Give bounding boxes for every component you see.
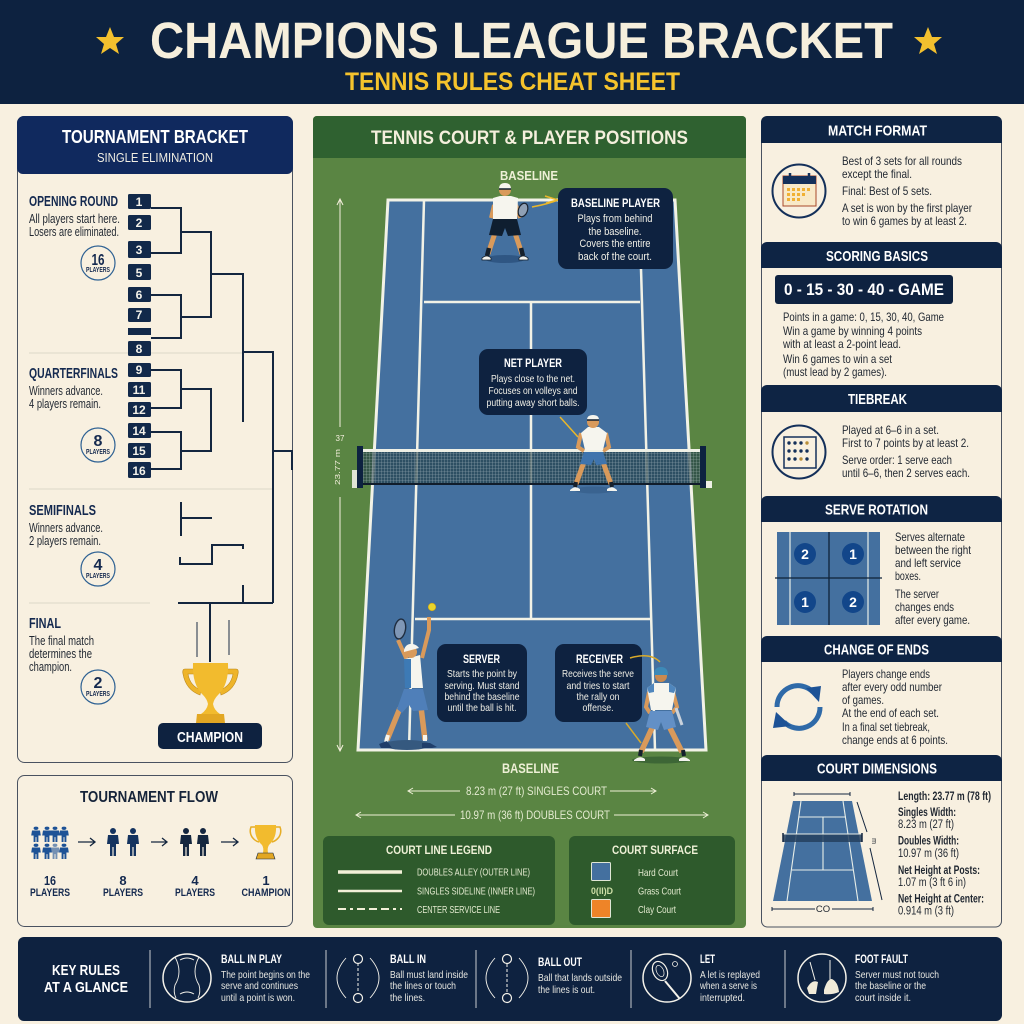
rule: foot fault: court inside it.	[855, 992, 911, 1004]
section: change of ends: At the end of each set.	[842, 706, 939, 720]
rule: let	[643, 954, 760, 1004]
panel: court surface	[569, 836, 735, 925]
rule: ball in play: until a point is won.	[221, 992, 295, 1004]
bracket header: TOURNAMENT BRACKET	[62, 127, 248, 147]
icon: ball in	[337, 954, 379, 1002]
section: match format: to win 6 games by at least 2.	[842, 214, 967, 228]
section: match format: A set is won by the first player	[842, 201, 972, 215]
bracket lines	[151, 208, 292, 662]
arrow	[151, 838, 167, 846]
player: baseline	[482, 183, 530, 263]
rule: let: interrupted.	[700, 992, 745, 1004]
section: court dimensions: 1.07 m (3 ft 6 in)	[898, 877, 966, 889]
flow: 16 players	[30, 827, 70, 899]
subtitle: TENNIS RULES CHEAT SHEET	[345, 68, 680, 96]
champion label: CHAMPION	[177, 730, 243, 746]
score sequence	[775, 275, 953, 304]
round: quarterfinals	[29, 365, 118, 462]
callout: receiver	[555, 644, 642, 722]
flow heading: TOURNAMENT FLOW	[80, 789, 218, 806]
title banner	[0, 0, 1024, 104]
seed boxes: 11	[133, 383, 146, 397]
section: match format: except the final.	[842, 167, 912, 181]
icon: change ends arrows	[773, 686, 821, 728]
length arrow: 23.77 m	[335, 449, 342, 485]
panel: court surface: Clay Court	[638, 904, 676, 916]
seed boxes: 7	[136, 308, 143, 322]
icon: racket	[643, 954, 691, 1002]
rule: ball in play: The point begins on the	[221, 969, 310, 981]
section: change of ends	[761, 636, 1002, 747]
score sequence: 0 - 15 - 30 - 40 - GAME	[784, 280, 944, 299]
badge: 2 players: 2	[94, 675, 103, 692]
section: match format: Final: Best of 5 sets.	[842, 184, 932, 198]
section: tiebreak: TIEBREAK	[848, 391, 907, 408]
flow: 8 players: PLAYERS	[103, 887, 143, 899]
section: court dimensions: 10.97 m (36 ft)	[898, 848, 959, 860]
section: serve rotation	[761, 496, 1002, 627]
key rules heading: AT A GLANCE	[44, 979, 128, 996]
badge: 8 players	[81, 428, 115, 462]
round: final: FINAL	[29, 615, 61, 632]
panel: tennis court	[313, 116, 746, 928]
serve rotation diagram: 2	[849, 594, 857, 610]
section: scoring basics: (must lead by 2 games).	[783, 365, 887, 379]
icon: ball	[163, 954, 211, 1002]
callout: receiver: Receives the serve	[562, 668, 634, 680]
section: scoring basics: Points in a game: 0, 15, 30, 40, Game	[783, 310, 944, 324]
seed boxes: 6	[136, 288, 143, 302]
section: match format: MATCH FORMAT	[828, 122, 927, 140]
panel: court surface: Grass Court	[638, 886, 681, 898]
seed boxes: 9	[136, 363, 143, 377]
dimension: singles width: 8.23 m (27 ft) SINGLES COURT	[466, 784, 608, 798]
panel: tournament flow	[18, 776, 292, 926]
rule: let: A let is replayed	[700, 969, 760, 981]
icon: tiebreak board	[772, 426, 826, 478]
badge: 8 players: 8	[94, 433, 103, 450]
key rules heading	[44, 962, 128, 996]
badge: 16 players	[81, 246, 115, 280]
callout: baseline player: Covers the entire	[580, 238, 650, 250]
dimension: doubles width	[356, 808, 708, 822]
rule: ball out: the lines is out.	[538, 984, 595, 996]
rule: ball in: the lines.	[390, 992, 425, 1004]
flow: 8 players: 8	[119, 873, 127, 888]
key rules heading: KEY RULES	[52, 962, 120, 979]
section: court dimensions	[761, 755, 1002, 918]
section: serve rotation: after every game.	[895, 613, 970, 627]
badge: 16 players: 16	[92, 252, 105, 269]
callout: server: behind the baseline	[444, 691, 520, 703]
icon: right star	[914, 27, 942, 54]
label: top baseline: BASELINE	[500, 168, 558, 183]
seed boxes: 1	[136, 195, 143, 209]
seed boxes: 8	[136, 342, 143, 356]
round: final: determines the	[29, 647, 92, 661]
section: scoring basics: with at least a 2-point lead.	[782, 337, 901, 351]
callout: receiver: RECEIVER	[576, 652, 623, 666]
rule: ball in play: BALL IN PLAY	[221, 954, 282, 966]
callout: receiver: the rally on	[576, 691, 620, 703]
callout: baseline player	[558, 188, 673, 269]
serve rotation diagram: 1	[849, 546, 857, 562]
section: change of ends: Players change ends	[842, 667, 930, 681]
section: match format: Best of 3 sets for all rounds	[842, 154, 962, 168]
badge: 2 players	[81, 670, 115, 704]
section: change of ends: CHANGE OF ENDS	[824, 642, 929, 658]
rule: let: LET	[700, 954, 715, 966]
callout: receiver: offense.	[582, 702, 614, 714]
net	[352, 446, 712, 488]
section: court dimensions: Net Height at Center:	[898, 894, 984, 906]
badge: 4 players	[81, 552, 115, 586]
rule: ball in: Ball must land inside	[390, 969, 468, 981]
title: CHAMPIONS LEAGUE BRACKET	[150, 12, 893, 69]
icon: feet	[798, 954, 846, 1002]
round: opening round: OPENING ROUND	[29, 193, 118, 210]
panel: court line legend	[323, 836, 555, 925]
section: scoring basics: Win a game by winning 4 points	[783, 324, 922, 338]
callout: net player: putting away short balls.	[486, 398, 580, 409]
section: serve rotation: changes ends	[895, 600, 954, 614]
round: final	[29, 615, 115, 704]
round: quarterfinals: 4 players remain.	[29, 397, 101, 411]
section: serve rotation: between the right	[895, 543, 972, 557]
seed boxes: 14	[132, 424, 146, 438]
rule: let: when a serve is	[699, 980, 757, 992]
callout: baseline player: back of the court.	[578, 251, 652, 263]
court surface and lines	[358, 200, 706, 750]
callout arrow: net	[560, 417, 578, 437]
flow: 4 players: 4	[191, 873, 199, 888]
rule: ball in	[337, 954, 468, 1004]
serve rotation diagram	[775, 532, 882, 625]
round: semifinals: Winners advance.	[29, 521, 103, 535]
section: court dimensions: 8.23 m (27 ft)	[898, 819, 954, 831]
icon: calendar	[772, 164, 826, 218]
serve rotation diagram: 1	[801, 594, 809, 610]
callout: baseline player: Plays from behind	[578, 213, 652, 225]
round: quarterfinals: QUARTERFINALS	[29, 365, 118, 382]
rule: foot fault	[798, 954, 939, 1004]
section: serve rotation: and left service	[895, 556, 961, 570]
seed boxes: 2	[136, 216, 143, 230]
section: court dimensions: Doubles Width:	[898, 836, 959, 848]
section: scoring basics: SCORING BASICS	[826, 248, 928, 265]
callout: net player	[479, 349, 587, 415]
dimension: singles width	[408, 784, 656, 798]
rule: ball out: Ball that lands outside	[538, 972, 622, 984]
panel: court line legend: SINGLES SIDELINE (INNER LINE)	[417, 886, 535, 898]
mini court diagram: m	[870, 838, 877, 844]
badge: 4 players: 4	[94, 557, 103, 574]
callout: receiver: and tries to start	[566, 680, 630, 692]
dimension: doubles width: 10.97 m (36 ft) DOUBLES COURT	[460, 808, 611, 822]
section: tiebreak	[761, 385, 1002, 480]
section: tiebreak: Played at 6–6 in a set.	[842, 423, 939, 437]
panel: court line legend: DOUBLES ALLEY (OUTER LINE)	[417, 868, 530, 878]
arrow	[78, 838, 95, 846]
seed boxes: 3	[136, 243, 143, 257]
callout: server: serving. Must stand	[444, 680, 520, 692]
callout: server: until the ball is hit.	[448, 702, 516, 714]
mini court diagram	[772, 792, 882, 915]
flow: 1 champion: CHAMPION	[242, 887, 291, 899]
callout arrow: baseline	[532, 196, 558, 207]
player: server	[379, 603, 437, 750]
flow: 16 players: PLAYERS	[30, 887, 70, 899]
rule: ball in play	[163, 954, 310, 1004]
serve rotation diagram: 2	[801, 546, 809, 562]
section: change of ends: after every odd number	[842, 680, 942, 694]
panel: court surface: Hard Court	[638, 867, 678, 879]
rule: foot fault: Server must not touch	[855, 969, 939, 981]
panel: rules sidebar	[761, 116, 1002, 927]
section: match format	[761, 116, 1002, 228]
panel: court line legend: COURT LINE LEGEND	[386, 843, 492, 857]
mini court diagram: CO	[816, 904, 830, 915]
bracket header: SINGLE ELIMINATION	[97, 150, 213, 165]
badge: 2 players: PLAYERS	[86, 691, 110, 698]
callout: server: Starts the point by	[447, 668, 518, 680]
seed boxes: 15	[132, 444, 146, 458]
round: final: champion.	[29, 660, 72, 674]
panel: court line legend: CENTER SERVICE LINE	[417, 905, 500, 916]
callout arrows: receiver	[626, 656, 660, 743]
section: scoring basics: Win 6 games to win a set	[783, 352, 893, 366]
section: serve rotation: boxes.	[895, 569, 921, 583]
label: bottom baseline: BASELINE	[502, 761, 559, 776]
rule: foot fault: the baseline or the	[855, 980, 926, 992]
seed boxes	[128, 194, 151, 478]
callout: server	[437, 644, 527, 722]
section: tiebreak: First to 7 points by at least 2.	[842, 436, 969, 450]
section: serve rotation: Serves alternate	[895, 530, 965, 544]
rule: ball in: the lines or touch	[390, 980, 456, 992]
seed boxes: 16	[132, 464, 146, 478]
section: serve rotation: The server	[895, 587, 939, 601]
round: semifinals: SEMIFINALS	[29, 502, 96, 519]
rule: ball in play: serve and continues	[221, 980, 298, 992]
flow: 4 players	[175, 828, 215, 899]
section: serve rotation: SERVE ROTATION	[825, 502, 928, 518]
flow: 16 players: 16	[44, 873, 56, 888]
flow: 8 players	[103, 828, 143, 899]
round: semifinals: 2 players remain.	[29, 534, 101, 548]
player: receiver	[632, 667, 690, 764]
section: court dimensions: COURT DIMENSIONS	[817, 760, 937, 778]
section: tiebreak: Serve order: 1 serve each	[842, 453, 952, 467]
arrow	[221, 838, 238, 846]
round: final: The final match	[29, 634, 94, 648]
callout: net player: Plays close to the net.	[491, 374, 575, 385]
flow: 1 champion	[242, 825, 291, 899]
badge: 16 players: PLAYERS	[86, 267, 110, 274]
callout: net player: NET PLAYER	[504, 356, 562, 370]
seed boxes: 5	[136, 266, 143, 280]
callout: net player: Focuses on volleys and	[488, 386, 578, 397]
panel: court surface: 0(ll)D	[591, 886, 613, 896]
bracket header	[17, 116, 293, 174]
icon: left star	[96, 27, 124, 54]
section: court dimensions: 0.914 m (3 ft)	[898, 906, 954, 918]
icon: ball out	[486, 954, 528, 1002]
callout: baseline player: the baseline.	[588, 226, 642, 238]
badge: 4 players: PLAYERS	[86, 573, 110, 580]
panel: tournament bracket	[17, 116, 293, 762]
badge: 8 players: PLAYERS	[86, 449, 110, 456]
section: change of ends: of games.	[842, 693, 884, 707]
round: opening round: All players start here.	[29, 212, 120, 226]
section: tiebreak: until 6–6, then 2 serves each.	[842, 466, 970, 480]
round: opening round: Losers are eliminated.	[29, 225, 119, 239]
flow: 4 players: PLAYERS	[175, 887, 215, 899]
champion label	[158, 723, 262, 749]
callout: server: SERVER	[463, 652, 500, 666]
flow: 1 champion: 1	[262, 873, 270, 888]
rule: ball in: BALL IN	[390, 954, 426, 966]
rule: ball out	[486, 954, 622, 1002]
section: scoring basics	[761, 242, 1002, 379]
seed boxes: 12	[132, 403, 146, 417]
section: court dimensions: Singles Width:	[898, 807, 956, 819]
rule: ball out: BALL OUT	[538, 957, 582, 969]
court heading	[313, 116, 746, 158]
court heading: TENNIS COURT & PLAYER POSITIONS	[371, 128, 688, 149]
length arrow: 37	[336, 434, 345, 443]
section: court dimensions: Length: 23.77 m (78 ft)	[898, 791, 991, 803]
icon: champion trophy	[183, 663, 238, 723]
round: opening round	[29, 193, 120, 280]
round: quarterfinals: Winners advance.	[29, 384, 103, 398]
length arrow	[335, 199, 345, 751]
section: change of ends: In a final set tiebreak,	[842, 720, 930, 734]
round: semifinals	[29, 502, 115, 586]
panel: key rules at a glance	[18, 937, 1002, 1021]
player: net	[570, 415, 617, 494]
section: change of ends: change ends at 6 points.	[842, 733, 948, 747]
callout: baseline player: BASELINE PLAYER	[571, 196, 660, 210]
rule: foot fault: FOOT FAULT	[855, 954, 908, 966]
panel: court surface: COURT SURFACE	[612, 843, 698, 857]
section: court dimensions: Net Height at Posts:	[898, 865, 980, 877]
